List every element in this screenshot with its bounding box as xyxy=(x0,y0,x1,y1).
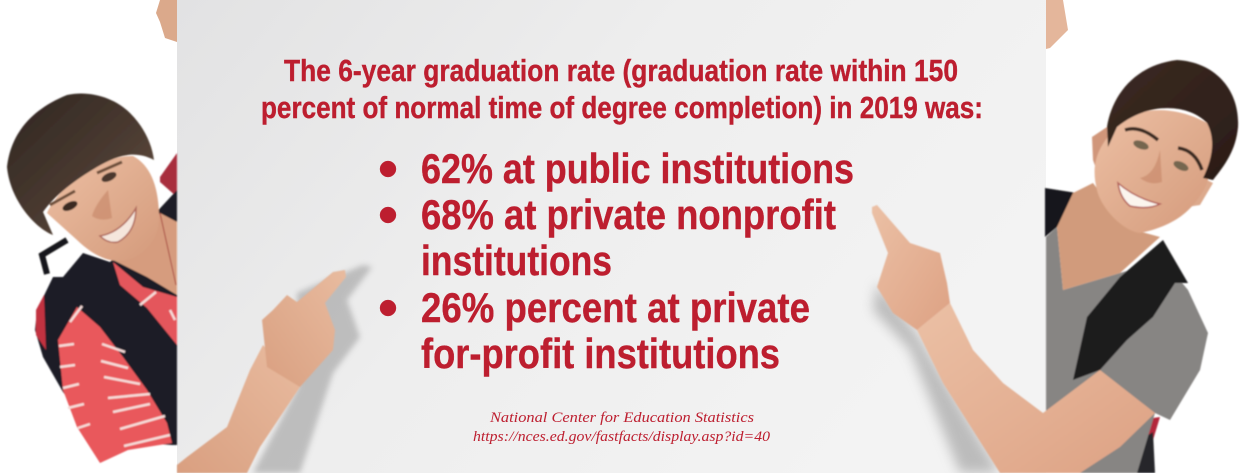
source citation: https://nces.ed.gov/fastfacts/display.asp?id=40 xyxy=(473,429,771,445)
eyes xyxy=(1132,139,1150,151)
source citation xyxy=(473,410,771,445)
face xyxy=(47,156,159,261)
grey t-shirt xyxy=(1046,227,1208,473)
neck xyxy=(113,213,177,295)
eyebrows and nose shadow xyxy=(50,162,122,205)
backpack bottom xyxy=(1105,417,1160,473)
backpack top behind shoulder xyxy=(160,153,177,197)
hair xyxy=(1107,60,1238,180)
heading: percent of normal time of degree completion) in 2019 was: xyxy=(261,90,983,125)
icon: right hand holding board top xyxy=(1023,0,1068,49)
bullet 3 xyxy=(380,300,396,316)
backpack strap xyxy=(1073,240,1188,380)
eyebrows xyxy=(1125,129,1202,170)
shirt sleeve xyxy=(58,307,172,463)
statistics list xyxy=(380,145,854,377)
bullet 1 xyxy=(380,161,396,177)
eyes xyxy=(61,199,79,213)
neck xyxy=(1057,183,1160,290)
person: right student xyxy=(872,60,1238,473)
nose shadow xyxy=(1140,150,1162,183)
stat: private for-profit: 26% percent at private xyxy=(421,284,810,331)
dark underlay of backpack xyxy=(35,190,177,445)
statistics list: institutions xyxy=(421,237,612,284)
red striped shirt chest xyxy=(113,262,177,345)
smile xyxy=(100,208,136,242)
smile xyxy=(1118,183,1160,208)
forearm xyxy=(177,345,300,473)
backpack top xyxy=(1045,188,1077,237)
stat: public: 62% at public institutions xyxy=(421,145,854,192)
necklace cord xyxy=(160,213,176,285)
source citation: National Center for Education Statistics xyxy=(489,410,754,426)
bullet 2 xyxy=(380,207,396,223)
heading xyxy=(261,53,983,125)
finger shadows on board xyxy=(253,265,1000,473)
heading: The 6-year graduation rate (graduation rate within 150 xyxy=(284,53,958,88)
forearm xyxy=(917,303,1155,473)
shirt stripes xyxy=(59,292,175,446)
face xyxy=(1095,110,1213,233)
statistics list: for-profit institutions xyxy=(421,330,780,377)
panel: white board xyxy=(177,0,1046,473)
backpack handle xyxy=(42,240,67,274)
pointing hand xyxy=(872,205,950,330)
red backpack edge xyxy=(36,295,46,350)
hair xyxy=(7,94,154,235)
icon: left hand holding board top xyxy=(156,0,208,42)
pointing hand xyxy=(262,270,346,387)
ear xyxy=(1092,127,1110,180)
person: left student xyxy=(7,94,346,473)
stat: private nonprofit: 68% at private nonprofit xyxy=(421,191,836,238)
